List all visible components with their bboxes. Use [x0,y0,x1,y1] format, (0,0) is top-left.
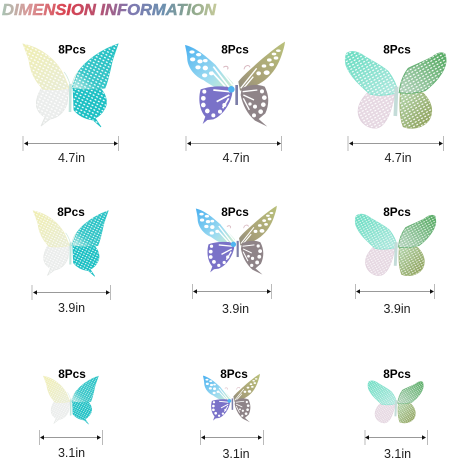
size label: row 1 right: 4.7in [384,151,412,165]
butterfly: large mint and green [345,52,446,128]
butterfly: small mint and green [368,381,423,423]
dimension arrow: row 2 left [32,285,110,300]
size label: row 2 left: 3.9in [58,301,85,315]
quantity label: row 3 centre: 8Pcs [220,367,248,381]
size label: row 2 right: 3.9in [383,302,411,316]
dimension arrow: row 1 left [23,136,118,151]
quantity label: row 1 centre: 8Pcs [221,42,249,56]
quantity label: row 2 left: 8Pcs [57,205,85,219]
size label: row 1 centre: 4.7in [222,151,250,165]
quantity label: row 1 right: 8Pcs [383,42,411,56]
butterfly: medium yellow and teal [33,211,108,276]
butterfly: medium blue and purple [196,206,277,275]
title: DIMENSION INFORMATION [2,2,216,19]
quantity label: row 3 right: 8Pcs [383,367,411,381]
dimension arrow: row 3 left [40,430,102,445]
size label: row 3 centre: 3.1in [222,447,250,461]
size label: row 2 centre: 3.9in [222,302,249,316]
size label: row 3 right: 3.1in [384,447,411,461]
dimension arrow: row 2 right [356,284,434,299]
size label: row 1 left: 4.7in [58,151,85,165]
butterfly: large blue and purple [185,42,285,127]
dimension arrow: row 3 centre [200,430,264,445]
dimension arrow: row 1 centre [186,136,282,151]
quantity label: row 2 right: 8Pcs [383,205,411,219]
butterfly: large yellow and teal [23,44,118,127]
quantity label: row 1 left: 8Pcs [58,42,86,56]
dimension arrow: row 2 centre [192,284,272,299]
quantity label: row 3 left: 8Pcs [58,367,86,381]
dimension arrow: row 1 right [348,136,444,151]
butterfly: small yellow and teal [43,376,98,424]
butterfly: small blue and purple [203,374,260,422]
dimension arrow: row 3 right [365,430,428,445]
size label: row 3 left: 3.1in [58,446,85,460]
butterfly: medium mint and green [355,214,436,276]
quantity label: row 2 centre: 8Pcs [221,205,249,219]
